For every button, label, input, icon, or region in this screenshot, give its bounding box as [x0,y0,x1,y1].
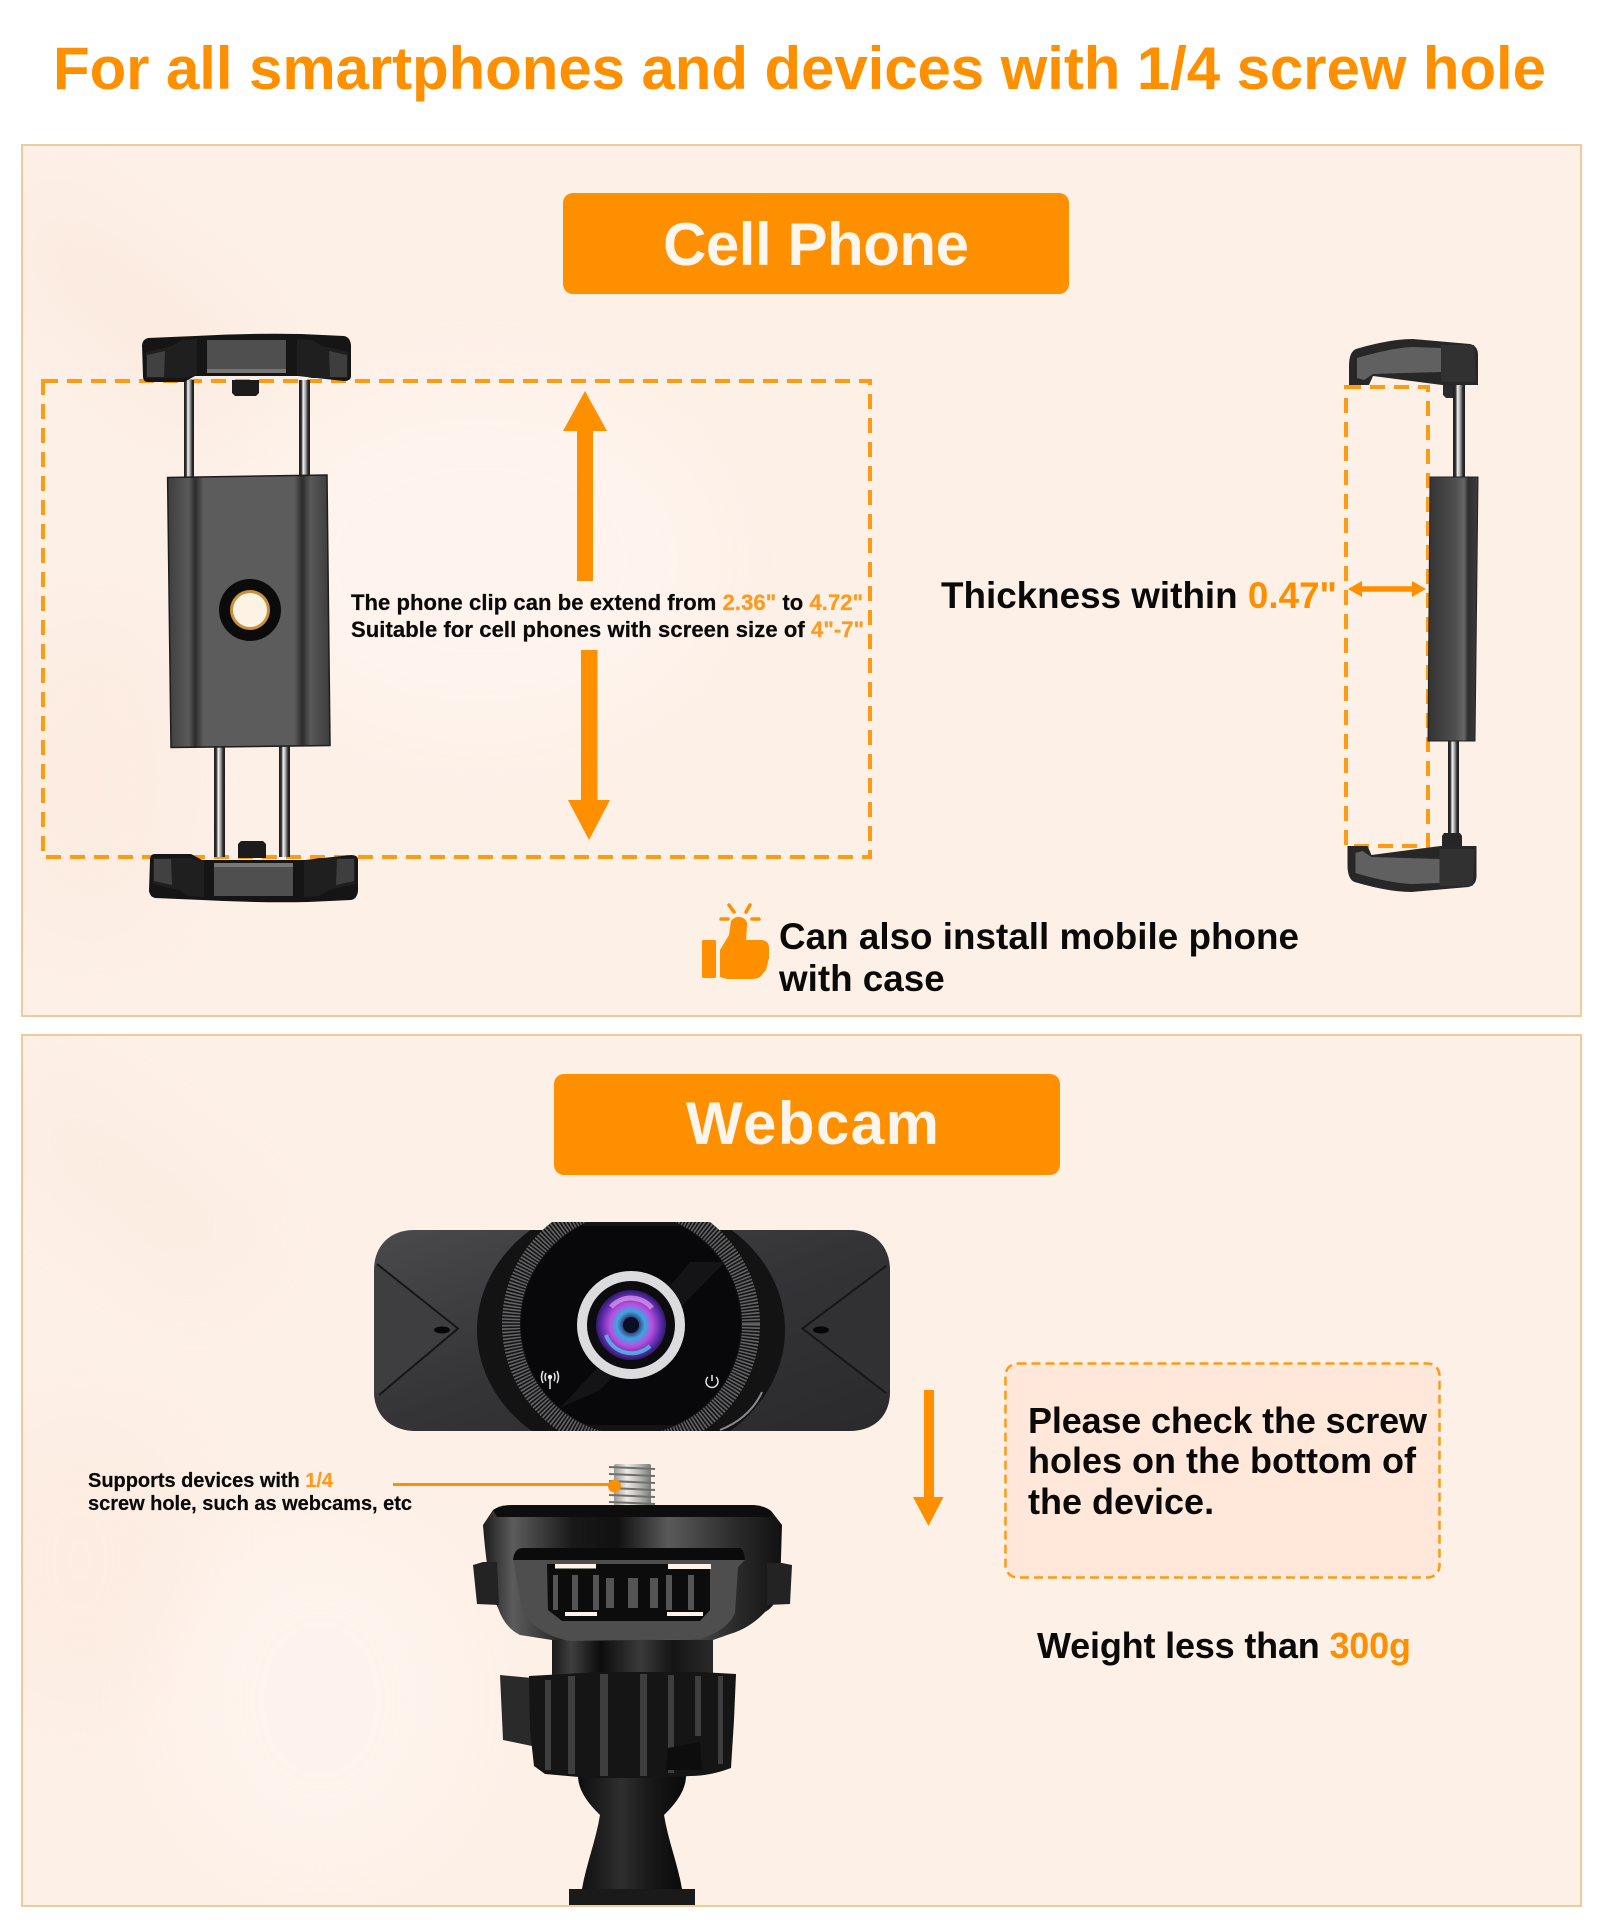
screw [609,1464,655,1508]
webcam [374,1222,890,1431]
side body [1428,477,1478,741]
icon: thumbs up [702,905,769,979]
phone clip: side view [1348,339,1478,892]
case note text [778,916,1299,999]
window [547,1564,711,1621]
heading: Webcam: Webcam [686,1090,939,1157]
clip extension text: The phone clip can be extend from 2.36" to 4.72" [351,590,863,615]
icon: antenna indicator [542,1371,558,1389]
weight note: Weight less than 300g [1037,1625,1411,1666]
side upper rod [1453,384,1465,478]
callout: check screw holes: Please check the screw [1028,1400,1428,1441]
arrow: down [568,650,610,840]
phone clip: front view [142,334,358,902]
panel: cell phone [0,145,1581,1016]
case note text: with case [778,958,945,999]
tripod mount [393,1464,792,1905]
stem base [569,1889,695,1905]
side top clamp [1349,339,1478,385]
arrow: webcam down [913,1390,944,1526]
camera housing [477,1230,785,1431]
knob [500,1672,736,1778]
upper rods [184,380,310,478]
gear [553,1575,694,1610]
top tab [232,380,259,396]
neck [552,1630,713,1676]
U bracket [513,1560,745,1641]
dashed thickness box [1346,387,1428,846]
slot [513,1548,745,1560]
side bottom clamp [1348,846,1476,892]
case note text: Can also install mobile phone [779,916,1299,957]
callout: check screw holes [1006,1364,1440,1578]
icon: power [706,1375,718,1387]
heading: Cell Phone [563,193,1069,294]
left wing [473,1562,499,1605]
webcam body [374,1230,890,1431]
dashed extension range box [43,381,870,857]
bottom clamp [149,854,358,902]
callout: check screw holes: holes on the bottom of [1028,1440,1417,1481]
thickness label: Thickness within 0.47" [941,575,1337,616]
panel: webcam [0,1035,1581,1906]
side lower rod [1448,740,1459,846]
leader line to screw [393,1480,621,1492]
arrow: thickness double-headed [1348,581,1426,597]
arrow: up [563,391,607,581]
side tab [1442,833,1462,848]
callout: check screw holes: the device. [1028,1481,1214,1522]
lens panel [521,1214,741,1434]
clip body [168,475,330,748]
side upper tab [1443,384,1453,398]
mounting hole [219,579,281,641]
lens [577,1271,685,1379]
right wing [767,1563,792,1605]
left chevron [374,1264,458,1395]
lower rods [214,745,290,857]
stem [578,1776,686,1889]
cap top edge [493,1505,772,1517]
heading: Cell Phone: Cell Phone [663,211,969,278]
support caption [88,1470,412,1515]
support caption: screw hole, such as webcams, etc [88,1493,412,1515]
bottom tab [238,841,266,858]
clip extension text [351,590,864,642]
right chevron [802,1266,890,1393]
heading: Webcam [554,1074,1060,1175]
focus ring [502,1222,760,1431]
support caption: Supports devices with 1/4 [88,1470,334,1492]
note: phone with case [702,905,1299,999]
cap [483,1505,782,1640]
clip extension text: Suitable for cell phones with screen size of 4"-7" [351,617,864,642]
title: For all smartphones and devices with 1/4 screw hole [53,35,1546,102]
top clamp [142,334,351,382]
